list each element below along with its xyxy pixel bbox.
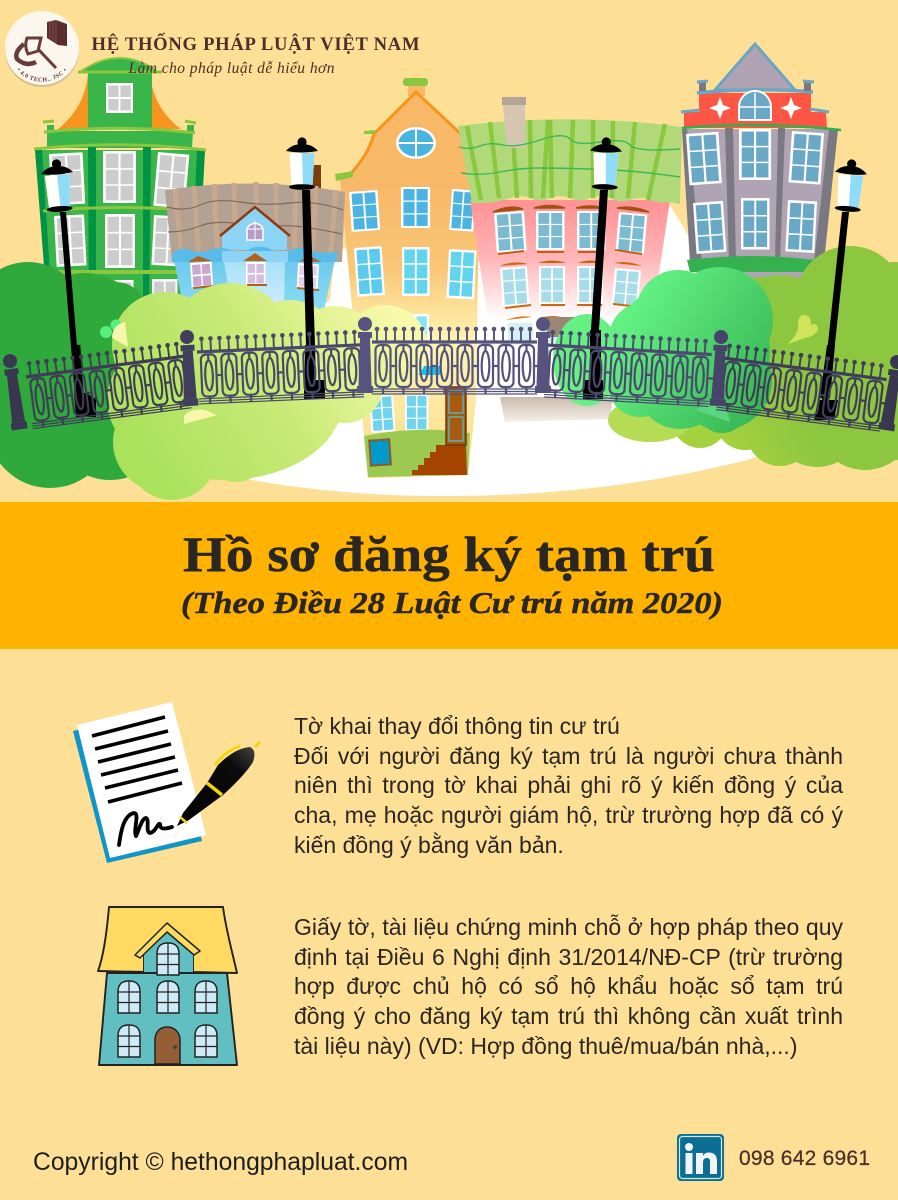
bush: bright green middle xyxy=(608,267,773,433)
text block: proof of legal residence: đồng ý cho đăng ký tạm trú thì không cần xuất trình xyxy=(294,1003,843,1029)
text block: residence declaration: niên thì trong tờ khai phải ghi rõ ý kiến đồng ý của xyxy=(294,772,843,798)
brand tagline: Làm cho pháp luật dễ hiểu hơn xyxy=(128,60,335,77)
blue house xyxy=(165,165,345,320)
icon: teal house xyxy=(98,907,237,1065)
bush: pale green middle xyxy=(553,314,621,406)
text block: proof of legal residence: tài liệu này) (VD: Hợp đồng thuê/mua/bán nhà,...) xyxy=(294,1033,797,1059)
title: Hồ sơ đăng ký tạm trú xyxy=(183,526,715,582)
green house xyxy=(34,58,206,310)
pink house xyxy=(458,97,682,422)
phone number: 098 642 6961 xyxy=(739,1147,870,1170)
heart decorations xyxy=(100,315,818,424)
text block: proof of legal residence: định tại Điều 6 Nghị định 31/2014/NĐ-CP (trừ trường xyxy=(294,944,843,970)
logo: • 4.0 TECH.. JSC • xyxy=(18,68,66,82)
brand name: HỆ THỐNG PHÁP LUẬT VIỆT NAM xyxy=(92,33,420,55)
icon: document with pen xyxy=(73,702,260,863)
icon: LinkedIn xyxy=(677,1134,724,1181)
bush: lime under middle xyxy=(608,398,692,442)
text block: residence declaration: Đối với người đăng ký tạm trú là người chưa thành xyxy=(294,743,843,769)
text block: proof of legal residence: hợp được chủ hộ có sổ hộ khẩu hoặc sổ tạm trú xyxy=(294,973,843,999)
bush: light lime left xyxy=(107,283,428,500)
grey house xyxy=(681,44,841,300)
copyright: Copyright © hethongphapluat.com xyxy=(33,1149,408,1176)
orange house xyxy=(335,78,480,478)
text block: residence declaration xyxy=(294,713,844,858)
text block: residence declaration: cha, mẹ hoặc người giám hộ, trừ trường hợp đã có ý xyxy=(294,802,843,828)
text block: proof of legal residence xyxy=(294,914,843,1059)
subtitle: (Theo Điều 28 Luật Cư trú năm 2020) xyxy=(181,585,723,620)
iron fence xyxy=(1,317,898,431)
bush: dark green left xyxy=(0,262,170,488)
bush: right mid green xyxy=(672,246,898,470)
text block: proof of legal residence: Giấy tờ, tài liệu chứng minh chỗ ở hợp pháp theo quy xyxy=(294,914,843,940)
text block: residence declaration: Tờ khai thay đổi thông tin cư trú xyxy=(294,713,620,739)
text block: residence declaration: kiến đồng ý bằng văn bản. xyxy=(294,832,564,858)
white ground xyxy=(130,205,898,496)
logo xyxy=(5,11,79,87)
title band xyxy=(0,502,898,649)
street lamps xyxy=(40,137,868,420)
